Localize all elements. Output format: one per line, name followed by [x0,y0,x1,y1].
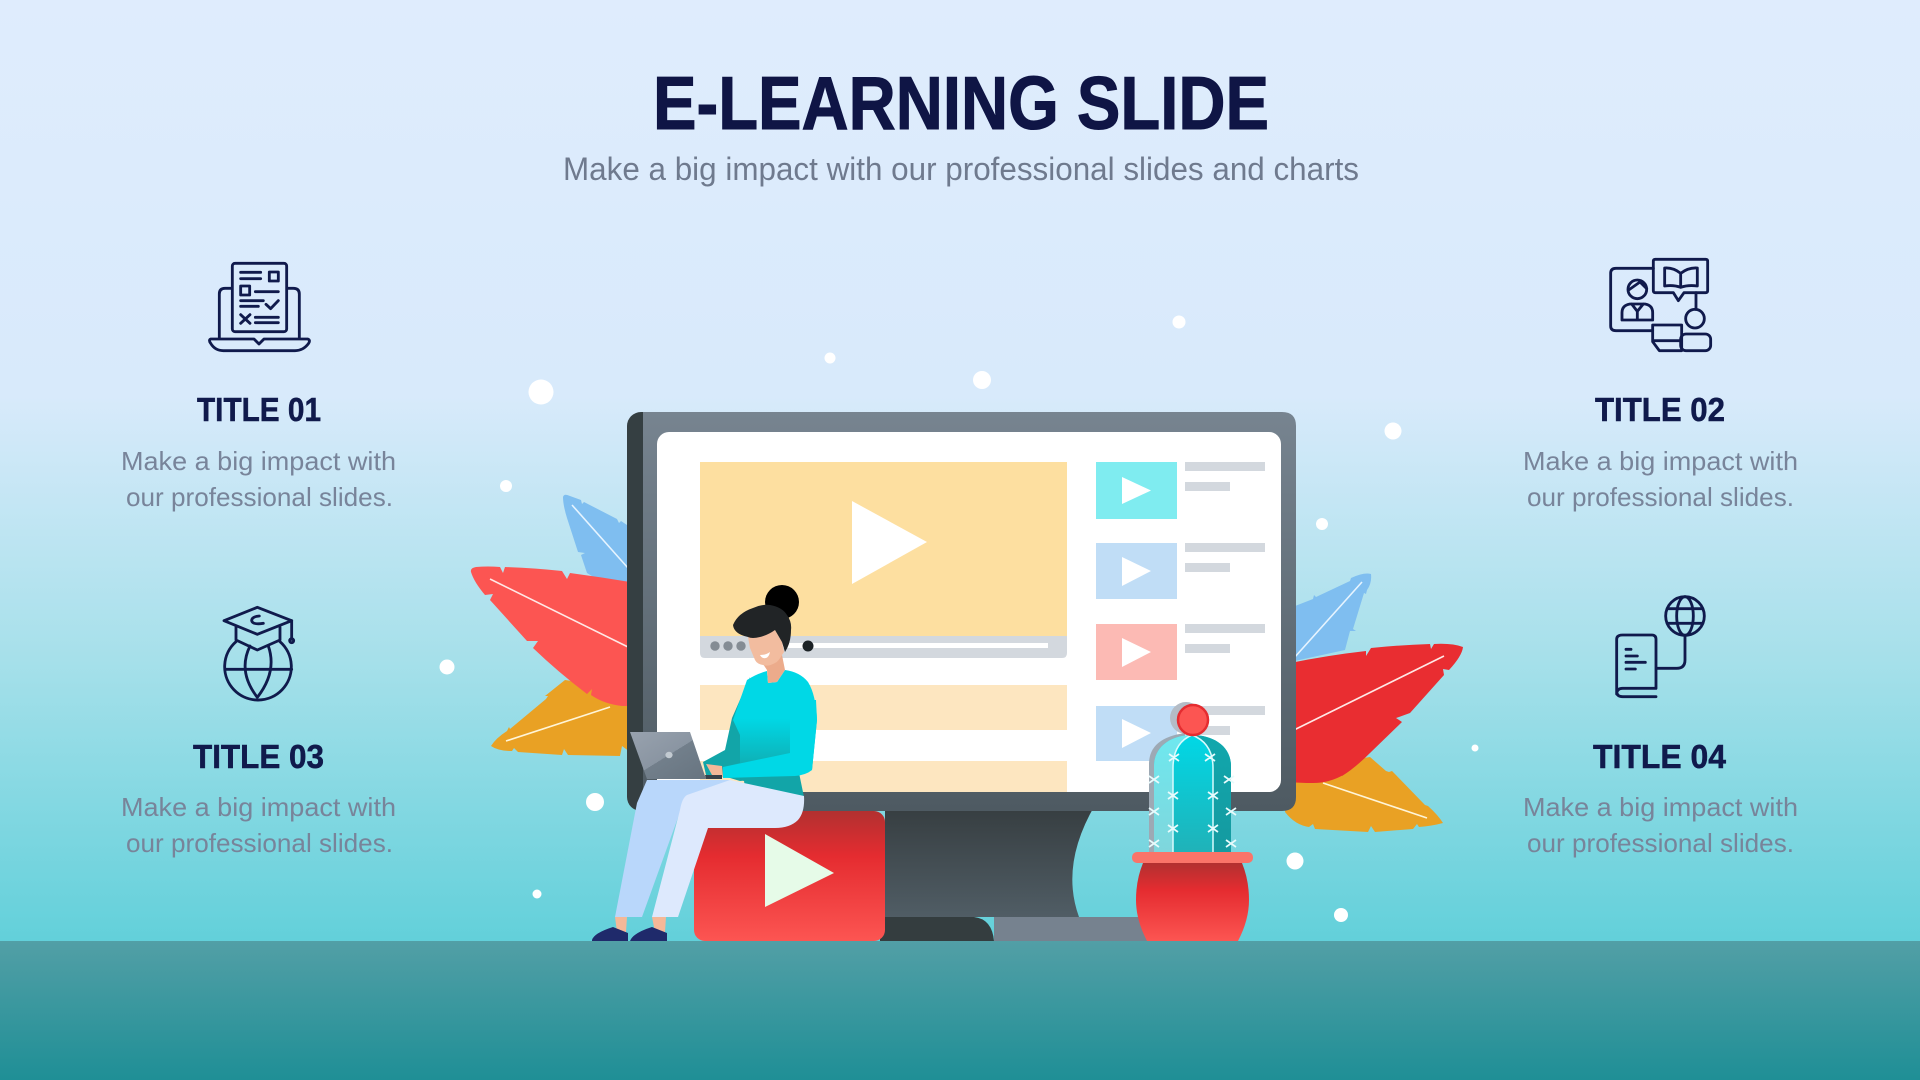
ankles [615,917,666,932]
torso lower shade [735,768,804,797]
leaf: right orange [1285,757,1443,832]
smile [760,652,770,658]
leaf: right blue [1290,574,1371,662]
stand base dark [880,917,994,941]
pot rim [1132,852,1253,863]
monitor screen [657,432,1281,792]
red play block [694,811,885,941]
big play icon [852,501,927,584]
stand base gray [994,917,1160,941]
icon: remote tutor [1611,259,1711,351]
hand [706,764,723,777]
description 04: our professional slides. [1527,828,1794,858]
monitor [627,412,1296,811]
face [748,630,784,666]
icon: graduation cap on globe [224,607,294,700]
cactus body [1154,735,1231,852]
sweater [723,670,817,777]
main video [700,462,1067,658]
pot [1136,863,1249,941]
playlist [1096,462,1265,761]
cactus right rib [1192,735,1231,852]
leaf: right red [1290,644,1463,783]
title 03: TITLE 03 [193,738,324,775]
left leaves [471,495,1463,832]
pants front leg [652,780,804,917]
stand neck [885,805,1095,917]
ground band [0,941,1920,1080]
title: E-LEARNING SLIDE [653,61,1269,145]
pants back leg [615,780,753,917]
playlist row 4 [1096,706,1265,761]
icon: laptop with quiz document [209,263,309,351]
neck [763,655,785,683]
cactus shadow [1149,733,1185,852]
cactus in pot [1132,702,1253,941]
subtitle: Make a big impact with our professional slides and charts [563,151,1359,187]
playlist row 3 [1096,624,1265,680]
playlist row 2 [1096,543,1265,599]
description 04 [1523,792,1798,858]
description 04: Make a big impact with [1523,792,1798,822]
woman with laptop [592,585,817,941]
laptop [630,732,722,779]
sweater arm [723,700,817,778]
shoes [592,927,667,941]
leaf: left red [471,566,630,706]
title 04: TITLE 04 [1593,738,1727,775]
cactus flower [1178,705,1208,735]
title 02: TITLE 02 [1595,391,1725,428]
cactus spines [1149,754,1236,847]
description 01 [121,446,396,512]
playlist row 1 [1096,462,1265,519]
video control bar [700,636,1067,658]
cactus left rib [1154,735,1192,852]
description 01: our professional slides. [126,482,393,512]
hair bun [765,585,799,619]
description 02: our professional slides. [1527,482,1794,512]
title 01: TITLE 01 [197,391,321,428]
description 03 [121,792,396,858]
cactus flower shadow [1170,702,1202,734]
leaf: left blue [563,495,630,600]
description 03: Make a big impact with [121,792,396,822]
description 01: Make a big impact with [121,446,396,476]
sweater back arm and torso shade [703,677,803,797]
description 02: Make a big impact with [1523,446,1798,476]
icon: book linked to globe [1617,597,1704,697]
description 02 [1523,446,1798,512]
description 03: our professional slides. [126,828,393,858]
decorative white dots [440,316,1478,922]
monitor frame [643,412,1296,811]
monitor stand [880,805,1160,941]
hair [733,605,791,652]
leaf: left orange [491,680,630,756]
content stripes [700,685,1067,730]
monitor back edge [627,412,687,811]
